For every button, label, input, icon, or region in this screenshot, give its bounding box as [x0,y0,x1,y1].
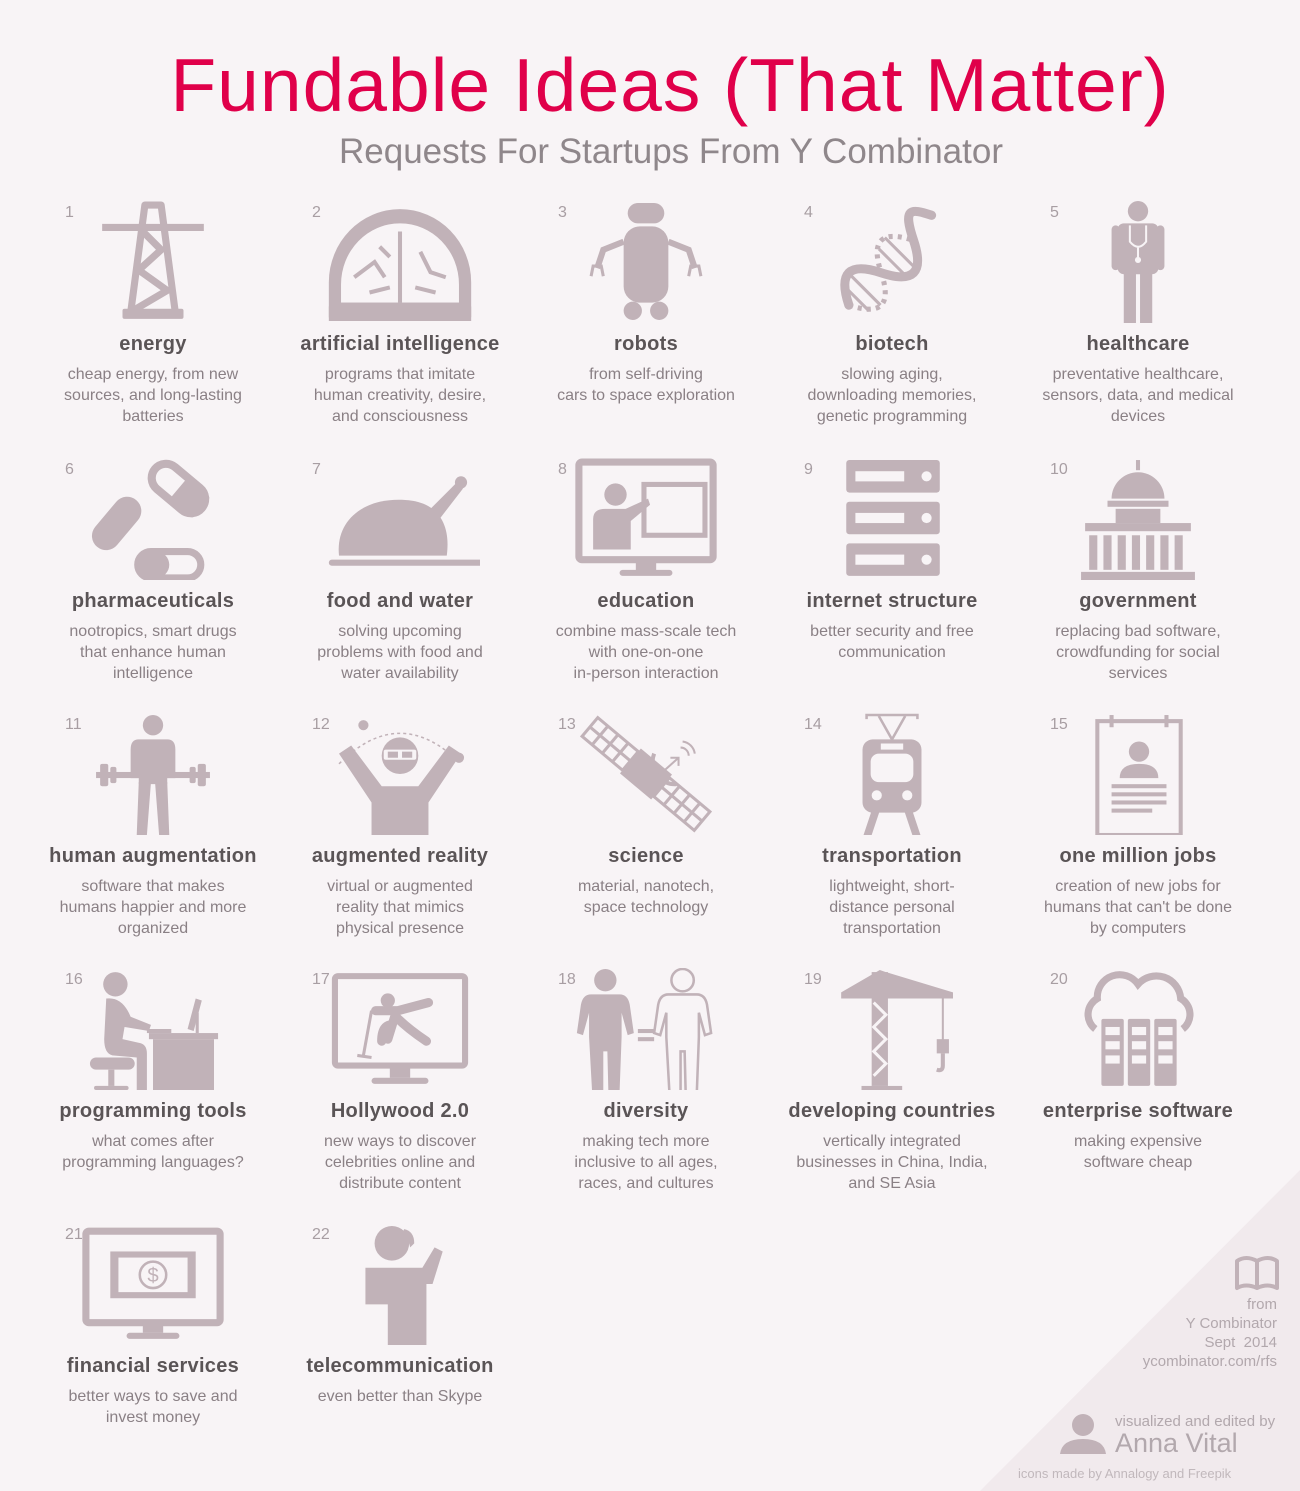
panel: government: replacing bad software, [1055,623,1221,640]
panel: pharmaceuticals [65,460,237,682]
panel: diversity [558,968,718,1192]
panel: healthcare: 5 [1050,204,1059,221]
panel: programming tools: what comes after [92,1133,214,1150]
panel: education: education [597,590,695,612]
panel: financial services: $ [147,1265,159,1287]
panel: education: 8 [558,461,567,478]
panel: healthcare [1042,201,1234,425]
panel: Hollywood 2.0: 17 [312,971,330,988]
panel: education [556,458,736,682]
panel: enterprise software: enterprise software [1043,1100,1233,1122]
panel: healthcare: sensors, data, and medical [1042,387,1234,404]
panel: energy: energy [119,333,187,355]
panel: one million jobs: one million jobs [1059,845,1217,867]
panel: science [558,716,714,916]
panel: food and water [312,461,483,682]
panel: artificial intelligence: human creativity, desire, [314,387,486,404]
panel: financial services [65,1226,239,1426]
panel: one million jobs: 15 [1050,716,1068,733]
panel: government: government [1079,590,1197,612]
panel: energy: cheap energy, from new [68,366,238,383]
panel: augmented reality: virtual or augmented [327,878,473,895]
panel: biotech [804,204,976,425]
title: Fundable Ideas (That Matter) [170,43,1170,127]
panel: developing countries: vertically integrated [823,1133,961,1150]
panel: one million jobs: humans that can't be done [1044,899,1232,916]
source text: ycombinator.com/rfs [1143,1353,1277,1370]
panel: government [1050,460,1221,682]
panel: augmented reality: physical presence [336,920,464,937]
credits: visualized and edited by [1115,1413,1275,1430]
panel: human augmentation [49,715,257,937]
panel: human augmentation: software that makes [81,878,225,895]
panel: financial services: better ways to save and [68,1388,237,1405]
panel: science: space technology [584,899,708,916]
panel: diversity: 18 [558,971,576,988]
panel: developing countries: 19 [804,971,822,988]
panel: energy: 1 [65,204,74,221]
panel: food and water: problems with food and [317,644,483,661]
panel: enterprise software [1043,971,1233,1171]
source text [1142,1296,1277,1370]
panel: biotech: downloading memories, [808,387,976,404]
panel: biotech: 4 [804,204,813,221]
panel: artificial intelligence: 2 [312,204,321,221]
panel: human augmentation: organized [118,920,188,937]
panel: diversity: diversity [604,1100,688,1122]
subtitle: Requests For Startups From Y Combinator [339,132,1003,171]
panel: telecommunication: even better than Skype [318,1388,482,1405]
panel: transportation [804,714,962,937]
panel: transportation: 14 [804,716,822,733]
panel: food and water: water availability [341,665,459,682]
panel: programming tools [59,971,247,1171]
panel: one million jobs [1044,715,1232,937]
panel: Hollywood 2.0: distribute content [339,1175,461,1192]
panel: diversity: inclusive to all ages, [574,1154,718,1171]
panel: Hollywood 2.0 [312,971,476,1192]
panel: healthcare: preventative healthcare, [1053,366,1223,383]
panel: robots: robots [614,333,678,355]
panel: augmented reality: reality that mimics [336,899,464,916]
panel: pharmaceuticals: pharmaceuticals [72,590,234,612]
panel: robots: cars to space exploration [557,387,735,404]
source text: Sept 2014 [1204,1334,1277,1351]
panel: artificial intelligence [300,204,500,425]
panel: developing countries: and SE Asia [848,1175,936,1192]
panel: healthcare: devices [1111,408,1165,425]
panel: augmented reality: augmented reality [312,845,488,867]
panel: pharmaceuticals: 6 [65,461,74,478]
panel: education: with one-on-one [589,644,703,661]
panel: energy [64,202,242,425]
source text: from [1247,1296,1277,1313]
panel: programming tools: programming languages? [62,1154,244,1171]
panel: healthcare: healthcare [1086,333,1190,355]
panel: one million jobs: creation of new jobs for [1055,878,1221,895]
panel: internet structure [804,460,978,661]
panel: energy: sources, and long-lasting [64,387,242,404]
icon: book [1235,1256,1279,1290]
panel: human augmentation: human augmentation [49,845,257,867]
panel: pharmaceuticals: nootropics, smart drugs [69,623,237,640]
panel: enterprise software: making expensive [1074,1133,1202,1150]
panel: artificial intelligence: and consciousness [332,408,468,425]
panel: government: crowdfunding for social [1056,644,1220,661]
panel: diversity: races, and cultures [578,1175,714,1192]
panel: financial services: 21 [65,1226,83,1243]
panel: human augmentation: 11 [65,716,82,733]
panel: science: 13 [558,716,576,733]
icon: author [1060,1414,1106,1454]
panel: human augmentation: humans happier and more [60,899,246,916]
panel: food and water: solving upcoming [338,623,462,640]
panel: government: services [1109,665,1167,682]
panel: food and water: food and water [327,590,473,612]
panel: biotech: biotech [855,333,929,355]
panel: internet structure: internet structure [806,590,978,612]
panel: energy: batteries [122,408,184,425]
panel: artificial intelligence: artificial intelligence [300,333,500,355]
panel: science: material, nanotech, [578,878,714,895]
panel: pharmaceuticals: intelligence [113,665,193,682]
panel: government: 10 [1050,461,1068,478]
panel: transportation: lightweight, short- [829,878,955,895]
source text: Y Combinator [1186,1315,1277,1332]
panel: developing countries: businesses in China, India, [796,1154,988,1171]
panel: food and water: 7 [312,461,321,478]
panel: financial services: financial services [67,1355,239,1377]
panel: transportation: transportation [822,845,962,867]
panel: enterprise software: software cheap [1084,1154,1192,1171]
panel: pharmaceuticals: that enhance human [80,644,226,661]
panel: artificial intelligence: programs that imitate [325,366,475,383]
panel: telecommunication: telecommunication [306,1355,494,1377]
panel: internet structure: 9 [804,461,813,478]
panel: diversity: making tech more [582,1133,710,1150]
panel: enterprise software: 20 [1050,971,1068,988]
panel: biotech: slowing aging, [841,366,943,383]
panel: financial services: invest money [106,1409,200,1426]
panel: education: combine mass-scale tech [556,623,736,640]
panel: telecommunication: 22 [312,1226,330,1243]
panel: biotech: genetic programming [817,408,967,425]
panel: internet structure: communication [838,644,946,661]
panel: transportation: transportation [843,920,941,937]
panel: augmented reality: 12 [312,716,330,733]
panel: science: science [608,845,684,867]
panel: programming tools: programming tools [59,1100,247,1122]
panel: transportation: distance personal [829,899,955,916]
panel: Hollywood 2.0: new ways to discover [324,1133,476,1150]
panel: telecommunication [306,1226,494,1405]
text: icons made by Annalogy and Freepik [1018,1466,1231,1481]
panel: one million jobs: by computers [1090,920,1186,937]
panel: augmented reality [312,716,488,937]
panel: Hollywood 2.0: Hollywood 2.0 [331,1100,469,1122]
panel: internet structure: better security and free [810,623,974,640]
panel: education: in-person interaction [574,665,718,682]
panel: developing countries [788,970,996,1192]
panel: robots: from self-driving [589,366,703,383]
panel: programming tools: 16 [65,971,83,988]
panel: robots: 3 [558,204,567,221]
panel: robots [557,203,735,404]
panel: Hollywood 2.0: celebrities online and [325,1154,475,1171]
text: Anna Vital [1115,1428,1238,1458]
panel: developing countries: developing countries [788,1100,996,1122]
